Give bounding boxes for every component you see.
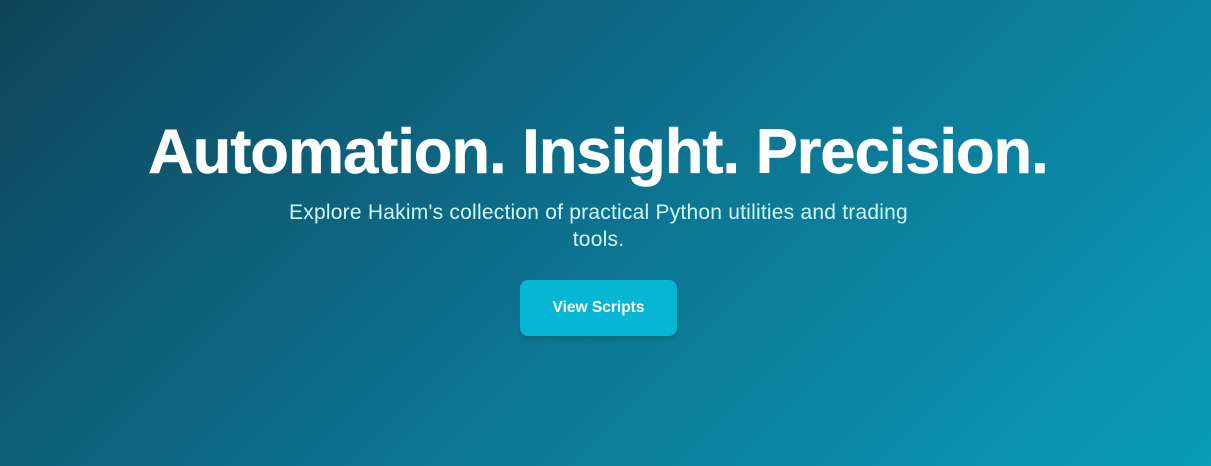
subtitle second line: tools. — [573, 228, 624, 251]
subtitle: Explore Hakim's collection of practical Python utilities and trading — [289, 201, 908, 224]
button: view scripts: View Scripts — [553, 299, 644, 316]
title: Automation. Insight. Precision. — [148, 117, 1048, 187]
button: view scripts — [520, 280, 677, 336]
